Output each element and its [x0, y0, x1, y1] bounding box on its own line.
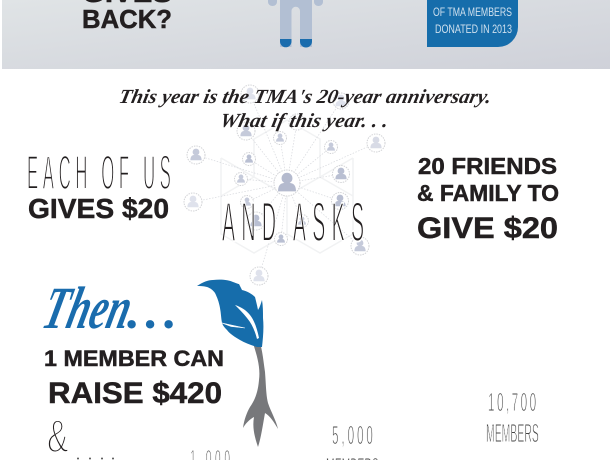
heading: gives back: BACK?: [82, 4, 172, 34]
stat: 10,700 members: MEMBERS: [486, 420, 539, 449]
intro text: This year is the TMA's 20-year anniversary.: [117, 86, 494, 108]
text: 20 friends and family: 20 FRIENDS: [418, 153, 557, 179]
text: and asks: AND ASKS: [222, 190, 364, 253]
text: 20 friends and family: & FAMILY TO: [417, 180, 559, 206]
text: each of us gives $20: [27, 145, 171, 224]
text: 1 member can raise $420: 1 MEMBER CAN: [44, 346, 224, 371]
callout: members donated: OF TMA MEMBERS: [433, 5, 512, 19]
network diagram: [184, 85, 385, 285]
intro text: What if this year. . .: [218, 110, 391, 132]
text: each of us gives $20: EACH OF US: [27, 145, 171, 200]
callout: members donated: DONATED IN 2013: [435, 22, 512, 36]
text: 20 friends and family: [417, 153, 559, 245]
icon: feather quill: [197, 280, 278, 447]
text: then: Then: [37, 276, 139, 342]
text: 1 member can raise $420: [44, 346, 224, 410]
callout: members donated: [427, 0, 518, 47]
intro text: [117, 86, 494, 132]
stat: 5,000 members: 5,000: [332, 422, 373, 450]
text: 1 member can raise $420: RAISE $420: [48, 377, 222, 410]
stat: 10,700 members: 10,700: [488, 389, 536, 417]
text: each of us gives $20: GIVES $20: [28, 193, 169, 224]
icon: person figure: [268, 0, 323, 48]
header band: [2, 0, 610, 69]
stat: 10,700 members: [486, 389, 539, 449]
stat: 5,000 members: [326, 422, 379, 460]
cropped letter tops: [77, 458, 114, 460]
text: 20 friends and family: GIVE $20: [417, 212, 558, 245]
text: then: . . .: [127, 283, 177, 340]
